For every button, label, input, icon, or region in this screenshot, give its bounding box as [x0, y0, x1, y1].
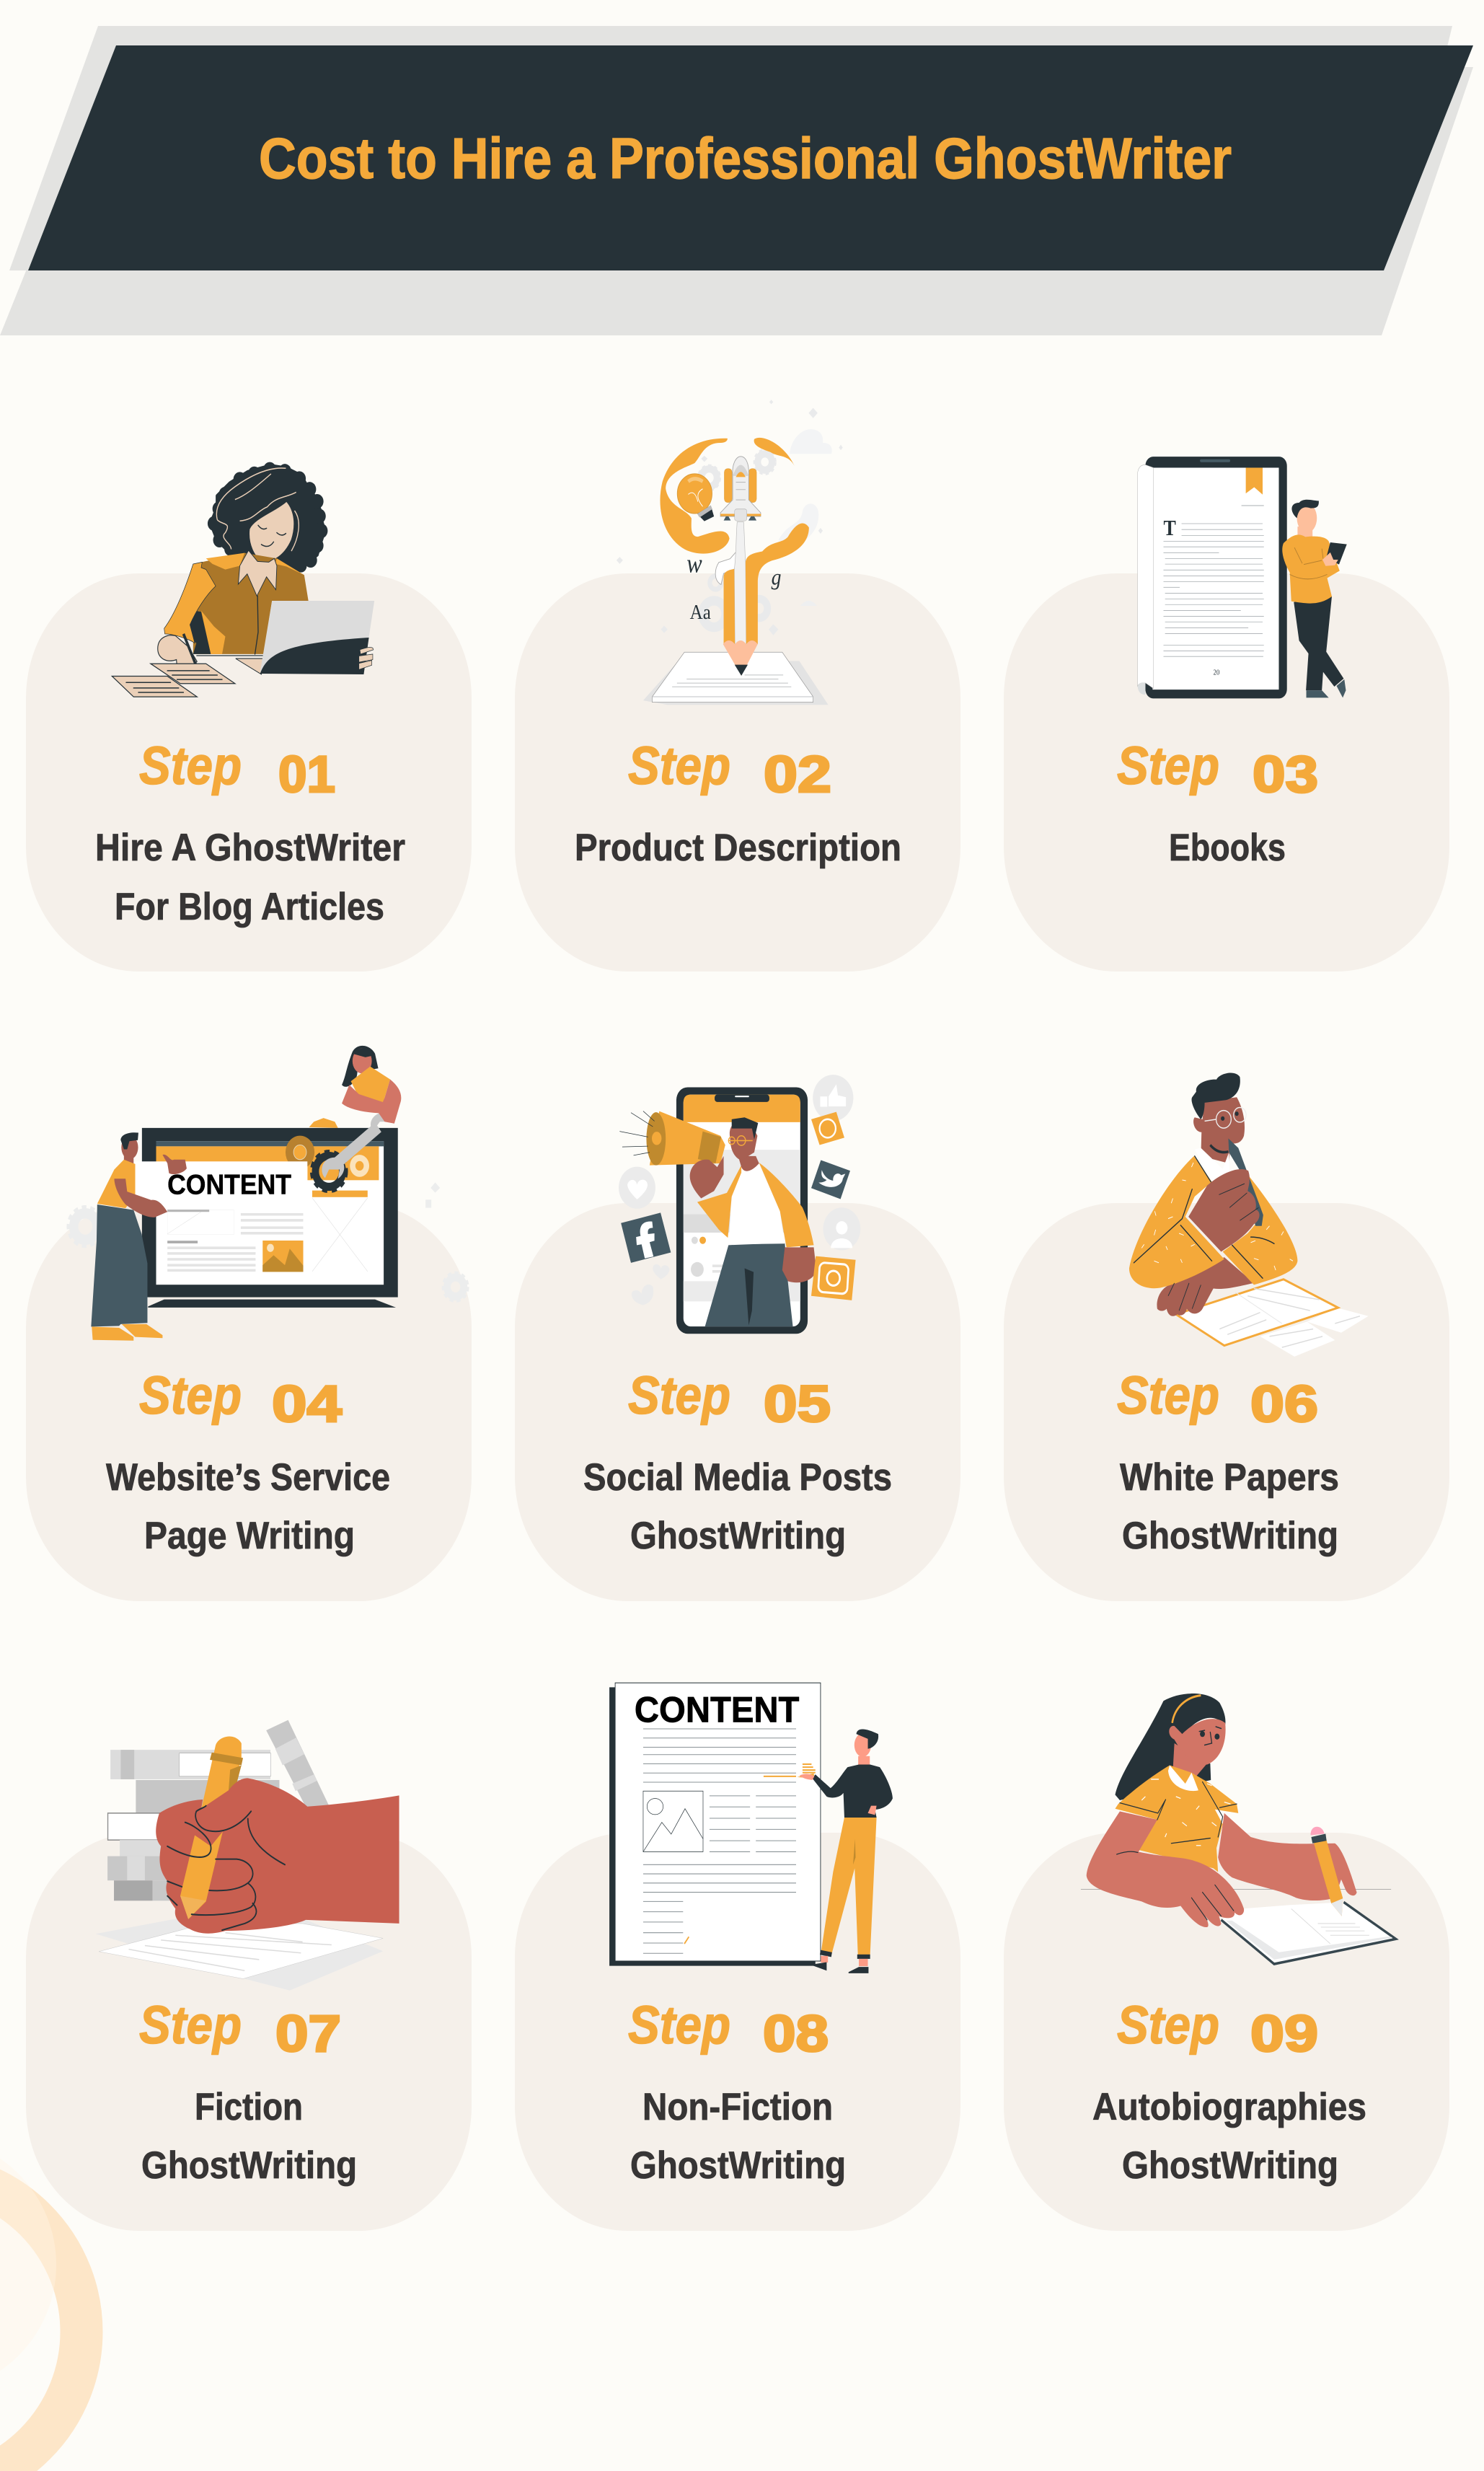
panel: step 03 [1004, 457, 1449, 972]
illustration: woman writing at laptop [112, 462, 374, 697]
step number: 09 [1250, 2006, 1318, 2063]
illustration: thinking man with papers [1129, 1073, 1369, 1357]
step number: 03 [1253, 746, 1318, 803]
panel: step 02 [515, 400, 960, 972]
panel text [583, 1456, 892, 1557]
step label: Step [628, 1365, 730, 1425]
step number: 07 [275, 2006, 341, 2063]
panel text: Website’s Service [106, 1456, 390, 1499]
panel text: White Papers [1120, 1456, 1339, 1499]
step label: Step [1117, 736, 1219, 796]
step label: Step [139, 1995, 242, 2055]
step number: 04 [272, 1376, 343, 1433]
step label: Step [628, 736, 730, 796]
panel text: Social Media Posts [583, 1456, 892, 1499]
man at left [91, 1132, 167, 1341]
panel: step 08 [515, 1683, 960, 2231]
illustration: content document and man [609, 1683, 893, 1973]
panel text [630, 2086, 846, 2187]
panel text [1120, 1456, 1339, 1557]
panel: step 06 [1004, 1073, 1449, 1601]
step number: 08 [763, 2006, 829, 2063]
panel text: For Blog Articles [115, 886, 384, 928]
panel text: GhostWriting [1122, 1515, 1338, 1557]
panel: step 05 [515, 1075, 960, 1601]
panel text [141, 2086, 357, 2187]
woman with wrench [342, 1046, 401, 1124]
letter g: g [772, 565, 781, 590]
large initial T: T [1163, 516, 1176, 540]
illustration: ebook tablet and man [1138, 457, 1347, 698]
panel text: Non-Fiction [642, 2086, 833, 2128]
screen heading: CONTENT [167, 1169, 291, 1200]
letter w: w [686, 550, 702, 578]
title: Cost to Hire a Professional GhostWriter [259, 126, 1232, 190]
decorative ring bottom left [0, 2136, 81, 2471]
panel text: Hire A GhostWriter [95, 827, 405, 869]
illustration: hand writing with books [96, 1720, 399, 1991]
panel text: GhostWriting [141, 2144, 357, 2187]
panel text [95, 827, 405, 928]
panel text [1092, 2086, 1366, 2187]
header banner [0, 26, 1473, 335]
step number: 02 [764, 746, 831, 803]
document heading: CONTENT [635, 1689, 800, 1730]
panel text: Ebooks [1169, 827, 1286, 869]
step label: Step [139, 736, 242, 796]
panel: step 09 [1004, 1693, 1449, 2231]
step number: 01 [278, 746, 335, 803]
panel: step 04 [26, 1046, 472, 1601]
step number: 05 [764, 1376, 831, 1433]
wrench [322, 1112, 392, 1179]
panel text: GhostWriting [1122, 2144, 1338, 2187]
panel text: Page Writing [144, 1515, 355, 1557]
step number: 06 [1250, 1376, 1318, 1433]
letters Aa: Aa [690, 600, 711, 623]
panel text: Autobiographies [1092, 2086, 1366, 2128]
illustration: social media phone [619, 1075, 860, 1334]
panel: step 07 [26, 1720, 472, 2231]
illustration: girl writing in book [1081, 1693, 1396, 1964]
panel text: GhostWriting [630, 2144, 846, 2187]
step label: Step [1117, 1365, 1219, 1425]
panel text: GhostWriting [630, 1515, 846, 1557]
step label: Step [139, 1365, 242, 1425]
page number: 20 [1214, 669, 1220, 677]
panel text: Fiction [195, 2086, 303, 2128]
panel text [106, 1456, 390, 1557]
illustration: pencil rocket [617, 400, 843, 705]
step label: Step [628, 1995, 730, 2055]
panel text: Product Description [575, 827, 901, 869]
illustration: website maintenance [69, 1046, 468, 1341]
step label: Step [1117, 1995, 1219, 2055]
panel: step 01 [26, 462, 472, 972]
